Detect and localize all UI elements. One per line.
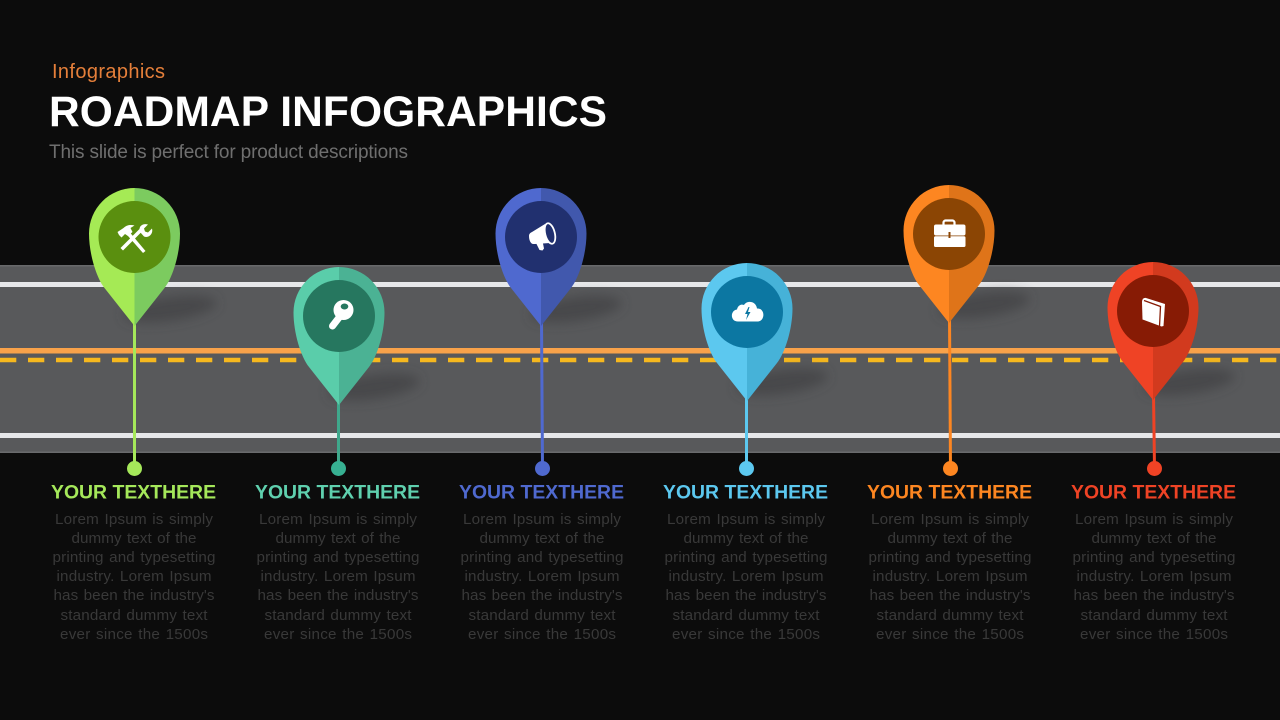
heading: YOUR TEXTHERE xyxy=(51,482,216,504)
body text: printing and typesetting xyxy=(460,549,624,566)
body text: dummy text of the xyxy=(1092,530,1216,547)
body text: ever since the 1500s xyxy=(264,626,412,643)
body text: Lorem Ipsum is simply xyxy=(259,511,417,528)
heading: YOUR TEXTHERE xyxy=(459,482,624,504)
body text: standard dummy text xyxy=(468,607,616,624)
pin 1: green tools xyxy=(89,188,218,476)
body text: industry. Lorem Ipsum xyxy=(668,568,824,585)
body text: has been the industry's xyxy=(870,587,1031,604)
main title: ROADMAP INFOGRAPHICS xyxy=(49,89,607,136)
road xyxy=(0,265,1280,453)
body text: printing and typesetting xyxy=(1072,549,1236,566)
body text: has been the industry's xyxy=(666,587,827,604)
body text xyxy=(664,511,828,643)
body text: ever since the 1500s xyxy=(60,626,208,643)
body text: has been the industry's xyxy=(1074,587,1235,604)
body text: printing and typesetting xyxy=(52,549,216,566)
body text: dummy text of the xyxy=(72,530,196,547)
body text: has been the industry's xyxy=(462,587,623,604)
body text: Lorem Ipsum is simply xyxy=(871,511,1029,528)
heading: YOUR TEXTHERE xyxy=(255,482,420,504)
body text: standard dummy text xyxy=(264,607,412,624)
body text: printing and typesetting xyxy=(256,549,420,566)
pin 5: orange briefcase xyxy=(904,185,1031,476)
pin 2: teal key xyxy=(294,267,421,476)
text column 3 xyxy=(459,482,624,643)
icon: book xyxy=(1142,298,1165,326)
text column 4 xyxy=(663,482,828,643)
body text: Lorem Ipsum is simply xyxy=(463,511,621,528)
pin 6: red book xyxy=(1108,262,1236,476)
heading: YOUR TEXTHERE xyxy=(1071,482,1236,504)
icon: cloud with lightning xyxy=(732,302,763,322)
body text: printing and typesetting xyxy=(664,549,828,566)
body text: dummy text of the xyxy=(888,530,1012,547)
body text xyxy=(868,511,1032,643)
body text: ever since the 1500s xyxy=(468,626,616,643)
body text: industry. Lorem Ipsum xyxy=(56,568,212,585)
body text: dummy text of the xyxy=(480,530,604,547)
heading: YOUR TEXTHERE xyxy=(867,482,1032,504)
body text: standard dummy text xyxy=(1080,607,1228,624)
text column 2 xyxy=(255,482,420,643)
body text: standard dummy text xyxy=(876,607,1024,624)
body text: standard dummy text xyxy=(672,607,820,624)
body text: ever since the 1500s xyxy=(1080,626,1228,643)
body text xyxy=(52,511,216,643)
body text: Lorem Ipsum is simply xyxy=(55,511,213,528)
pin 3: blue megaphone xyxy=(496,188,623,476)
body text: Lorem Ipsum is simply xyxy=(1075,511,1233,528)
body text: Lorem Ipsum is simply xyxy=(667,511,825,528)
text column 6 xyxy=(1071,482,1236,643)
body text xyxy=(1072,511,1236,643)
body text: ever since the 1500s xyxy=(876,626,1024,643)
title block xyxy=(49,61,607,163)
body text: industry. Lorem Ipsum xyxy=(1076,568,1232,585)
body text xyxy=(460,511,624,643)
body text: dummy text of the xyxy=(276,530,400,547)
body text xyxy=(256,511,420,643)
body text: standard dummy text xyxy=(60,607,208,624)
body text: ever since the 1500s xyxy=(672,626,820,643)
body text: has been the industry's xyxy=(258,587,419,604)
body text: industry. Lorem Ipsum xyxy=(872,568,1028,585)
icon: briefcase xyxy=(934,220,966,247)
icon: key xyxy=(332,300,354,326)
body text: industry. Lorem Ipsum xyxy=(464,568,620,585)
body text: printing and typesetting xyxy=(868,549,1032,566)
text column 5 xyxy=(867,482,1032,643)
subtitle: This slide is perfect for product descriptions xyxy=(49,142,408,163)
eyebrow label: Infographics xyxy=(52,61,165,83)
text column 1 xyxy=(51,482,216,643)
heading: YOUR TEXTHERE xyxy=(663,482,828,504)
icon: megaphone xyxy=(529,222,557,250)
pin 4: cyan cloud xyxy=(702,263,829,476)
icon: hammer and wrench xyxy=(118,224,152,253)
body text: has been the industry's xyxy=(54,587,215,604)
body text: dummy text of the xyxy=(684,530,808,547)
body text: industry. Lorem Ipsum xyxy=(260,568,416,585)
